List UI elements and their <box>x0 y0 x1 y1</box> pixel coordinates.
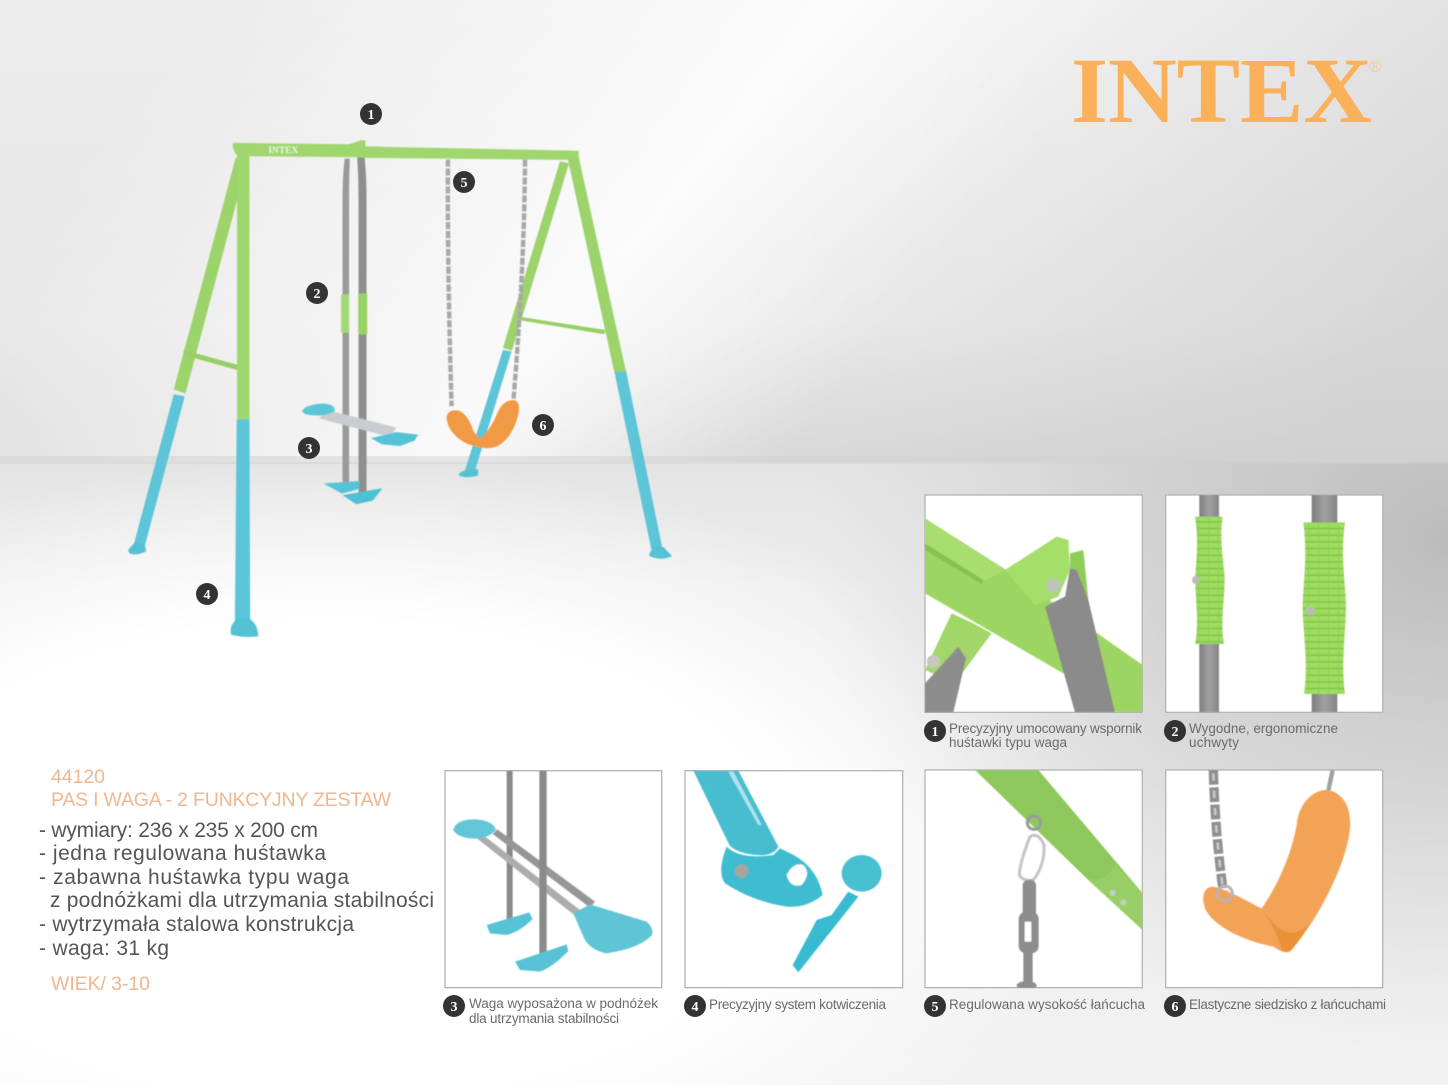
panel 4: anchoring system detail <box>685 771 903 988</box>
marker 6: 6 <box>540 419 546 434</box>
caption 2: Wygodne, ergonomiczne <box>1189 721 1338 736</box>
seesaw poles <box>341 154 367 494</box>
marker 4: 4 <box>204 588 210 603</box>
panel 2: ergonomic grips detail <box>1166 495 1383 712</box>
feature list: - jedna regulowana huśtawka <box>39 842 326 865</box>
panel 3: seesaw with foot rests detail <box>445 771 662 988</box>
orange swing seat <box>447 400 519 448</box>
caption 4: Precyzyjny system kotwiczenia <box>709 997 886 1012</box>
feature list: - wytrzymała stalowa konstrukcja <box>39 913 354 936</box>
caption 1: huśtawki typu waga <box>949 735 1067 750</box>
caption 4: 4 <box>692 1000 698 1015</box>
feature list <box>39 819 434 960</box>
product specification text block <box>39 766 434 995</box>
panel 1: seesaw bracket detail <box>925 495 1143 712</box>
feature list: - waga: 31 kg <box>39 937 169 960</box>
panel 5: adjustable chain height detail <box>925 770 1143 990</box>
feature list: z podnóżkami dla utrzymania stabilności <box>50 889 434 912</box>
right rear leg <box>459 161 569 477</box>
caption 2 <box>1164 720 1338 750</box>
feature list: - wymiary: 236 x 235 x 200 cm <box>39 819 318 842</box>
caption 6: Elastyczne siedzisko z łańcuchami <box>1189 997 1386 1012</box>
marker 5 <box>453 171 475 193</box>
age range: WIEK/ 3-10 <box>51 973 150 995</box>
marker 1: 1 <box>368 108 374 123</box>
marker 3: 3 <box>306 442 312 457</box>
front left leg and rear left leg <box>128 151 258 637</box>
caption 6 <box>1164 995 1386 1017</box>
caption 5 <box>924 995 1145 1017</box>
caption 5: 5 <box>932 1000 938 1015</box>
right front leg <box>521 158 672 559</box>
marker 3 <box>298 437 320 459</box>
swing chains <box>448 160 525 406</box>
number markers on the product <box>196 103 554 605</box>
caption 3: Waga wyposażona w podnóżek <box>469 996 658 1011</box>
top beam: INTEX <box>268 146 299 156</box>
seesaw board with pedals <box>302 404 418 446</box>
caption 2: 2 <box>1172 725 1178 740</box>
marker 5: 5 <box>460 176 468 191</box>
top beam <box>233 140 579 160</box>
caption 5: Regulowana wysokość łańcucha <box>949 997 1145 1012</box>
model number: 44120 <box>51 766 105 788</box>
INTEX logo: ® <box>1369 57 1382 76</box>
marker 2: 2 <box>314 287 320 302</box>
caption 2: uchwyty <box>1189 735 1239 750</box>
marker 4 <box>196 583 218 605</box>
caption 3 <box>443 995 658 1026</box>
panel 6: flexible seat with chains detail <box>1166 770 1383 988</box>
caption 3: dla utrzymania stabilności <box>469 1011 619 1026</box>
caption 4 <box>684 995 886 1017</box>
product illustration: swing set <box>128 140 672 637</box>
marker 6 <box>532 414 554 436</box>
INTEX logo: INTEX <box>1071 40 1372 143</box>
marker 1 <box>360 103 382 125</box>
marker 2 <box>306 282 328 304</box>
product name: PAS I WAGA - 2 FUNKCYJNY ZESTAW <box>51 789 392 811</box>
caption 3: 3 <box>450 1000 458 1015</box>
caption 1: Precyzyjny umocowany wspornik <box>949 721 1142 736</box>
feature list: - zabawna huśtawka typu waga <box>39 866 349 889</box>
caption 1: 1 <box>932 725 938 740</box>
seesaw foot rests <box>324 481 383 504</box>
caption 6: 6 <box>1172 1000 1178 1015</box>
caption 1 <box>924 720 1142 750</box>
